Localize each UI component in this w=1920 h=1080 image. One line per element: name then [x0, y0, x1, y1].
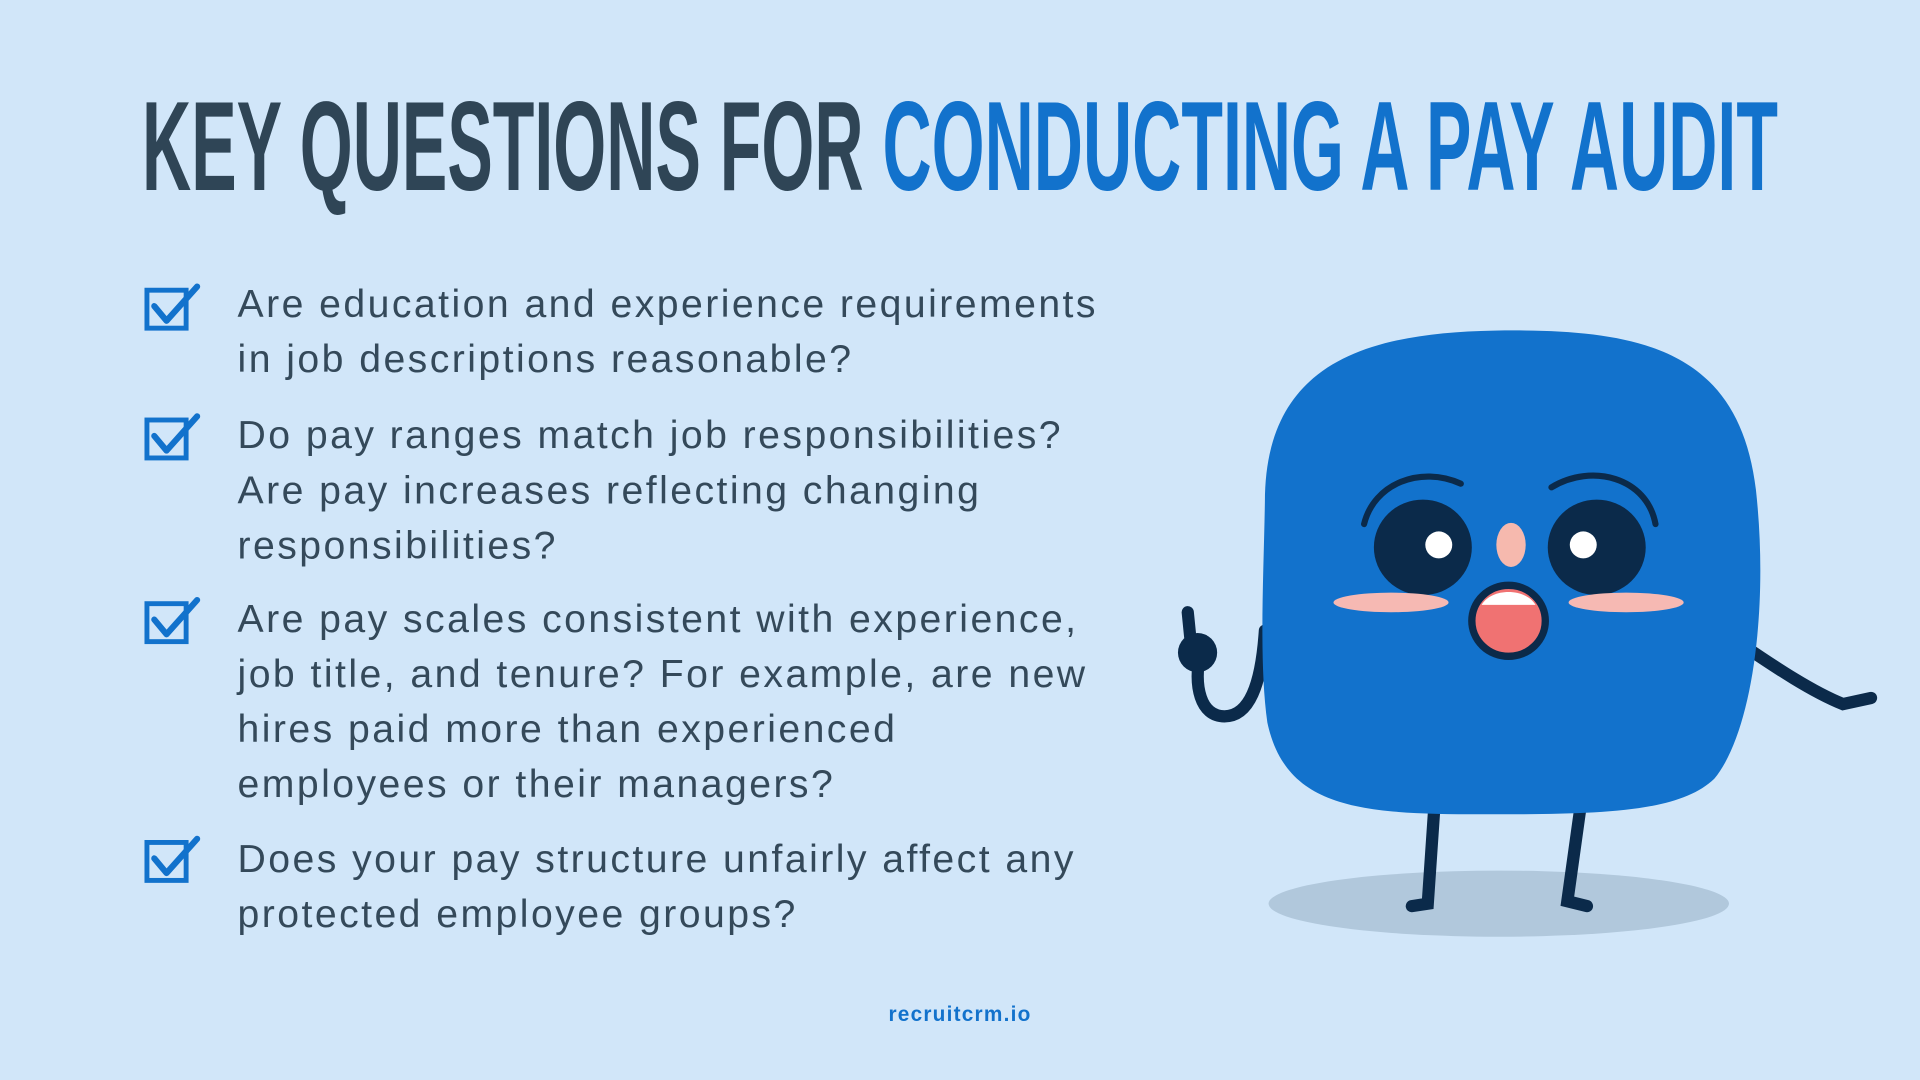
- item 2: Are pay increases reflecting changing: [238, 469, 981, 512]
- item 4: Does your pay structure unfairly affect any: [238, 838, 1076, 881]
- icon: checkbox 4: [147, 839, 197, 880]
- item 4: [147, 838, 1076, 936]
- icon: checkbox 1: [147, 287, 197, 328]
- item 3: hires paid more than experienced: [238, 708, 897, 751]
- item 3: Are pay scales consistent with experience,: [238, 598, 1079, 641]
- item 2: Do pay ranges match job responsibilities?: [238, 414, 1063, 457]
- item 3: employees or their managers?: [238, 763, 835, 806]
- mascot character: [1178, 330, 1871, 937]
- item 1: Are education and experience requirements: [238, 283, 1098, 326]
- item 1: [147, 283, 1098, 381]
- footer: brand: recruitcrm.io: [888, 1003, 1032, 1026]
- checklist: [147, 283, 1098, 936]
- item 2: responsibilities?: [238, 524, 558, 567]
- icon: checkbox 3: [147, 600, 197, 642]
- item 2: [147, 414, 1063, 567]
- icon: checkbox 2: [147, 416, 197, 458]
- item 4: protected employee groups?: [238, 893, 798, 936]
- item 3: job title, and tenure? For example, are new: [237, 653, 1088, 696]
- item 3: [147, 598, 1088, 806]
- item 1: in job descriptions reasonable?: [238, 338, 854, 381]
